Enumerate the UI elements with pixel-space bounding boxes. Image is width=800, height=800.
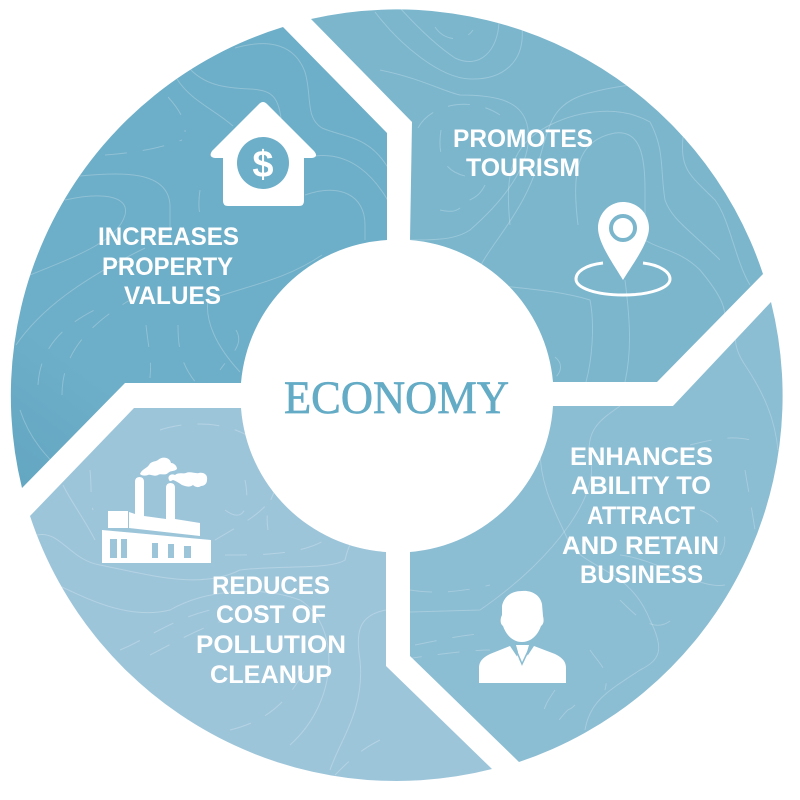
icon: house with dollar bbox=[211, 102, 316, 206]
label: enhances ability to attract and retain business: BUSINESS bbox=[580, 561, 703, 589]
label: enhances ability to attract and retain business: ATTRACT bbox=[587, 502, 695, 530]
panel: reduces cost of pollution cleanup bbox=[30, 408, 492, 781]
label: increases property values bbox=[98, 223, 239, 310]
label: reduces cost of pollution cleanup: CLEANUP bbox=[210, 661, 332, 689]
label: reduces cost of pollution cleanup: REDUCES bbox=[212, 572, 330, 600]
label: promotes tourism bbox=[453, 125, 593, 182]
title: economy: ECONOMY bbox=[284, 372, 509, 424]
icon: business person bbox=[479, 591, 566, 683]
label: increases property values: INCREASES bbox=[98, 223, 239, 251]
label: increases property values: PROPERTY bbox=[102, 253, 233, 281]
label: enhances ability to attract and retain business: ENHANCES bbox=[570, 443, 713, 471]
icon: house with dollar: $ bbox=[252, 144, 274, 186]
label: promotes tourism: TOURISM bbox=[466, 154, 580, 182]
label: increases property values: VALUES bbox=[124, 282, 221, 310]
label: reduces cost of pollution cleanup: COST OF bbox=[216, 601, 326, 629]
icon: factory with smoke bbox=[102, 458, 211, 563]
label: reduces cost of pollution cleanup bbox=[196, 572, 346, 689]
panel: promotes tourism bbox=[311, 8, 763, 382]
label: reduces cost of pollution cleanup: POLLUTION bbox=[196, 631, 346, 659]
label: enhances ability to attract and retain business bbox=[562, 443, 719, 589]
label: promotes tourism: PROMOTES bbox=[453, 125, 593, 153]
label: enhances ability to attract and retain business: ABILITY TO bbox=[571, 472, 711, 500]
label: enhances ability to attract and retain business: AND RETAIN bbox=[562, 532, 719, 560]
panel: increases property values bbox=[11, 27, 392, 488]
panel: enhances ability to attract and retain business bbox=[400, 302, 783, 762]
icon: map pin bbox=[576, 202, 670, 295]
